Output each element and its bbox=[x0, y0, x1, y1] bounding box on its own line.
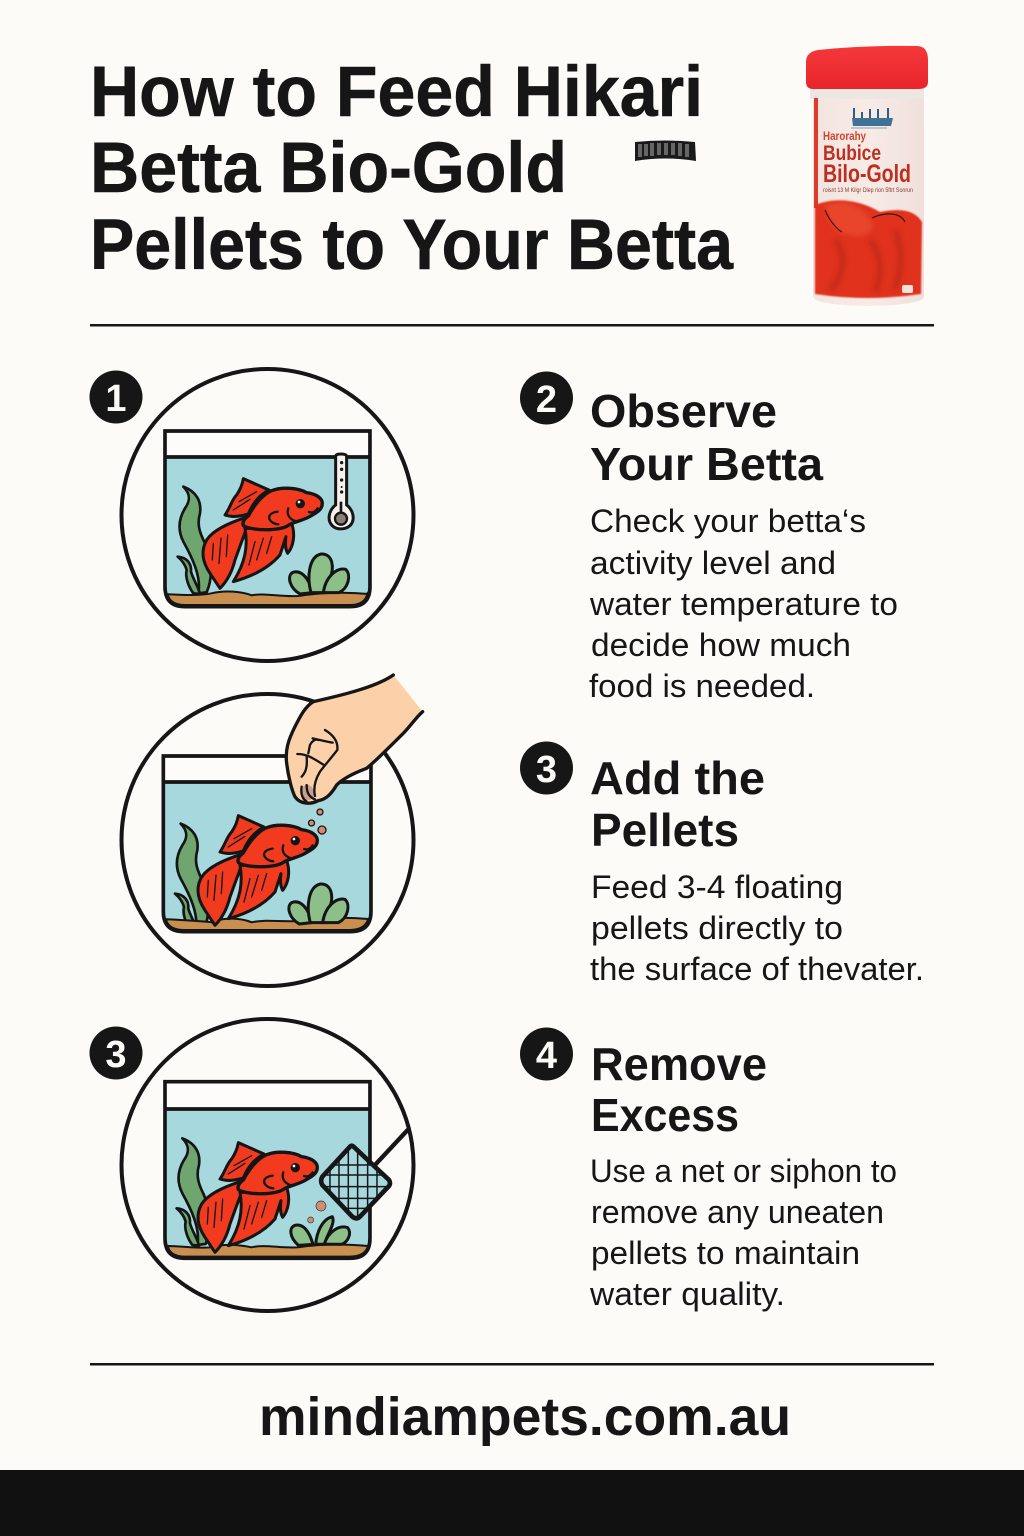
aquarium bbox=[163, 756, 371, 932]
badge 3 (left): 3 bbox=[105, 1034, 127, 1076]
body text: decide how much bbox=[591, 627, 851, 663]
heading: Add the bbox=[590, 752, 765, 804]
icon: small black jar lid bbox=[635, 140, 696, 161]
body text: water quality. bbox=[589, 1276, 785, 1312]
jar label text: Bubice bbox=[823, 142, 881, 165]
step 3 block bbox=[520, 742, 924, 987]
jar label text: roisnt 13 M Kilgr Dlep rion 5ftrt Sonrun bbox=[823, 187, 913, 194]
body text: Feed 3-4 floating bbox=[591, 869, 843, 905]
product jar bbox=[806, 46, 928, 306]
heading bbox=[590, 385, 823, 490]
hand dropping pellets bbox=[286, 675, 423, 803]
pellets and net bbox=[308, 1130, 408, 1223]
body text bbox=[589, 503, 898, 704]
body text: pellets to maintain bbox=[591, 1235, 860, 1271]
body text: remove any uneaten bbox=[591, 1194, 884, 1230]
jar label text: Harorahy bbox=[823, 129, 866, 143]
panel: step 1 illustration bbox=[122, 369, 414, 661]
panel: step 3 illustration bbox=[122, 1019, 414, 1311]
jar lower red fish label bbox=[815, 201, 922, 298]
step 2 block bbox=[520, 372, 898, 704]
title: Betta Bio-Gold bbox=[90, 129, 567, 208]
step 4 block bbox=[520, 1028, 897, 1312]
body text: Use a net or siphon to bbox=[590, 1153, 897, 1189]
body text bbox=[589, 1153, 897, 1312]
body text: activity level and bbox=[590, 545, 836, 581]
body text: water temperature to bbox=[589, 586, 898, 622]
red strip bbox=[814, 98, 818, 208]
badge 3: 3 bbox=[536, 749, 557, 791]
pellets falling bbox=[308, 809, 326, 834]
aquarium bbox=[165, 1082, 370, 1258]
heading: Observe bbox=[590, 385, 777, 437]
badge 1: 1 bbox=[105, 378, 127, 420]
top divider bbox=[90, 324, 934, 326]
title: Pellets to Your Betta bbox=[90, 206, 733, 285]
body text: food is needed. bbox=[589, 668, 815, 704]
badge 1 bbox=[90, 370, 142, 424]
heading bbox=[590, 752, 765, 856]
jar logo bbox=[851, 108, 893, 128]
body text: Check your betta‘s bbox=[590, 503, 866, 539]
body text bbox=[590, 869, 924, 987]
heading: Pellets bbox=[591, 804, 739, 856]
jar label text bbox=[823, 129, 913, 194]
jar cap bbox=[806, 46, 928, 89]
heading: Excess bbox=[591, 1089, 739, 1141]
badge 2: 2 bbox=[536, 379, 557, 421]
badge 3 (left) bbox=[90, 1026, 142, 1080]
jar label text: Bilo-Gold bbox=[823, 160, 911, 188]
thermometer bbox=[329, 454, 353, 529]
panel: step 2 illustration bbox=[122, 675, 423, 986]
jar body bbox=[813, 97, 924, 306]
aquarium bbox=[165, 431, 370, 607]
heading: Remove bbox=[591, 1038, 767, 1090]
title: How to Feed Hikari bbox=[90, 53, 703, 132]
heading: Your Betta bbox=[590, 438, 823, 490]
heading bbox=[591, 1038, 767, 1141]
body text: the surface of thevater. bbox=[590, 951, 924, 987]
fish bbox=[198, 1143, 317, 1252]
fish bbox=[198, 816, 317, 925]
title bbox=[90, 53, 733, 285]
badge 3 bbox=[520, 742, 573, 794]
body text: pellets directly to bbox=[591, 910, 843, 946]
bottom black bar bbox=[0, 1470, 1024, 1536]
circle frame bbox=[122, 369, 414, 661]
circle frame bbox=[122, 1019, 414, 1311]
badge 4 bbox=[520, 1028, 573, 1080]
footer website: mindiampets.com.au bbox=[259, 1387, 791, 1447]
circle frame bbox=[122, 694, 414, 986]
bottom divider bbox=[90, 1363, 934, 1366]
badge 4: 4 bbox=[536, 1035, 557, 1077]
jar collar bbox=[810, 88, 924, 99]
badge 2 bbox=[520, 372, 573, 424]
fish bbox=[203, 479, 322, 588]
